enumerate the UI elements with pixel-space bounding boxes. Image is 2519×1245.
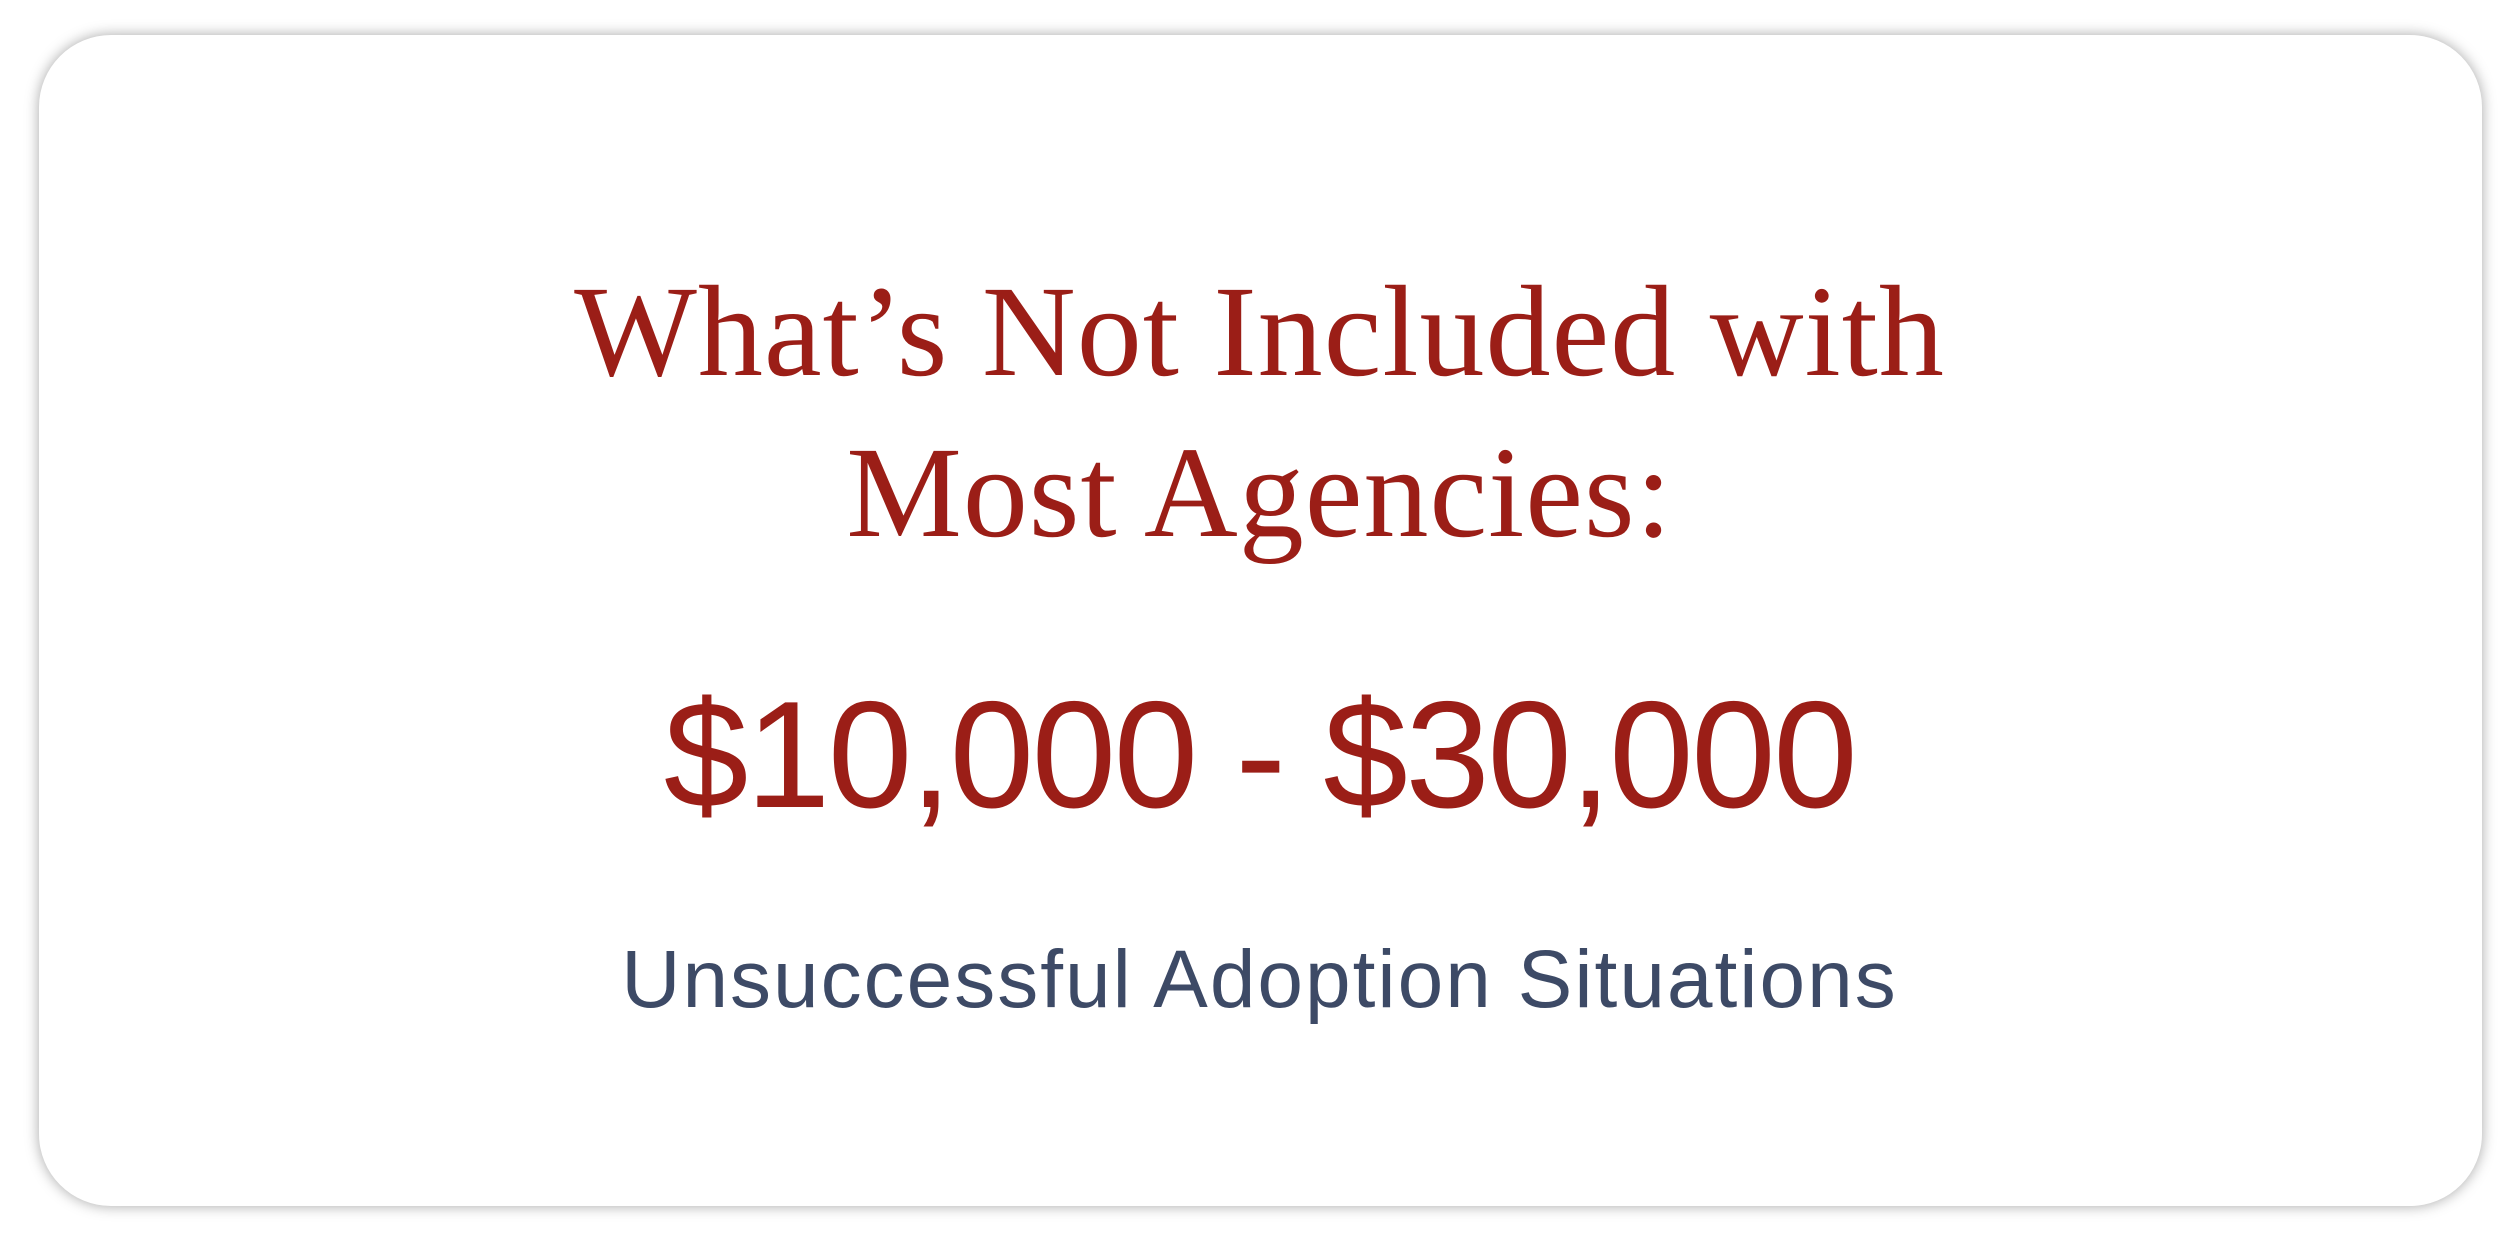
subtitle: Unsuccessful Adoption Situations bbox=[621, 934, 1898, 1025]
price range: $10,000 - $30,000 bbox=[664, 670, 1855, 840]
title: What’s Not Included with bbox=[574, 260, 1945, 404]
title bbox=[574, 260, 1945, 565]
title: Most Agencies: bbox=[846, 421, 1673, 565]
